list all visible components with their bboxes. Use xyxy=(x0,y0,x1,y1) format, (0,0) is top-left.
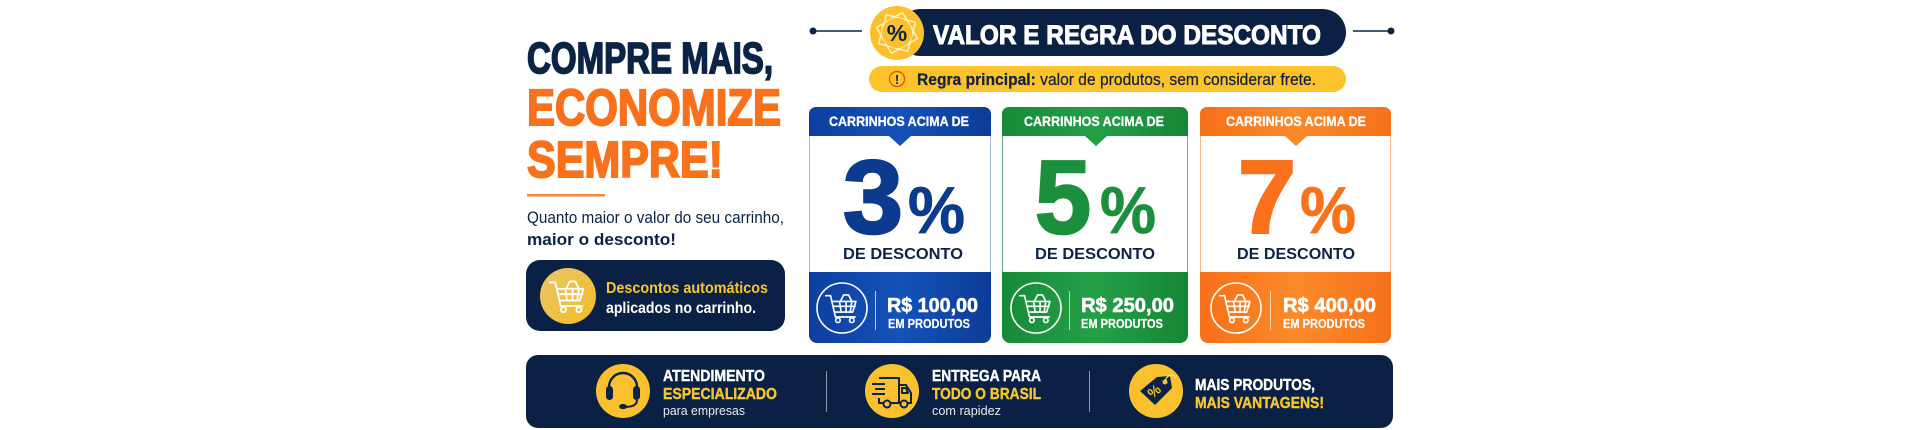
card header xyxy=(1200,107,1391,146)
icon: headset xyxy=(596,364,650,418)
benefit text: vantagens xyxy=(1195,377,1324,412)
panel: bottom benefits bar xyxy=(526,355,1393,428)
benefit text: vantagens: MAIS PRODUTOS, xyxy=(1195,377,1315,394)
card header xyxy=(1002,107,1188,146)
threshold: EM PRODUTOS xyxy=(888,317,970,331)
card header xyxy=(809,107,991,146)
value: 5% xyxy=(1035,140,1156,256)
benefit text: entrega xyxy=(932,368,1041,418)
panel: 7% card: DE DESCONTO xyxy=(1237,246,1355,263)
value: 7%: 7 xyxy=(1238,140,1296,256)
icon: cart xyxy=(540,268,596,324)
title: ECONOMIZE xyxy=(527,79,781,136)
callout: descontos automaticos xyxy=(526,260,785,331)
subtitle text: Quanto maior o valor do seu carrinho, xyxy=(527,209,784,227)
callout text xyxy=(606,280,768,317)
threshold: EM PRODUTOS xyxy=(1283,317,1365,331)
icon: cart xyxy=(1011,283,1061,333)
icon: cart xyxy=(1211,283,1261,333)
benefit text: entrega: com rapidez xyxy=(932,404,1001,418)
threshold: R$ 400,00 xyxy=(1283,294,1376,317)
value: 5%: % xyxy=(1100,173,1156,247)
icon: percent badge: % xyxy=(887,20,907,46)
icon: delivery truck xyxy=(865,364,919,418)
benefit text: entrega: ENTREGA PARA xyxy=(932,368,1041,385)
value: 3% xyxy=(843,140,965,256)
rule banner xyxy=(869,66,1346,92)
card header: CARRINHOS ACIMA DE xyxy=(1024,113,1164,129)
icon: cart xyxy=(817,283,867,333)
panel: left intro xyxy=(526,34,785,331)
icon: price tag xyxy=(1129,364,1183,418)
heading: valor e regra do desconto xyxy=(810,6,1394,60)
benefit text: atendimento: para empresas xyxy=(663,404,745,418)
benefit text: atendimento: ATENDIMENTO xyxy=(663,368,765,385)
icon: warning xyxy=(890,72,904,87)
panel: 5% card xyxy=(1002,107,1188,343)
benefit text: vantagens: MAIS VANTAGENS! xyxy=(1195,395,1324,412)
orange divider xyxy=(527,194,605,196)
panel: 5% card: DE DESCONTO xyxy=(1035,246,1155,263)
subtitle text: maior o desconto! xyxy=(527,230,676,249)
callout text: Descontos automáticos xyxy=(606,280,768,297)
panel: 3% card: DE DESCONTO xyxy=(843,246,963,263)
card header: CARRINHOS ACIMA DE xyxy=(1226,113,1366,129)
benefit text: atendimento: ESPECIALIZADO xyxy=(663,386,777,403)
panel: 3% card xyxy=(809,107,991,343)
icon: warning: ! xyxy=(895,72,899,87)
card header: CARRINHOS ACIMA DE xyxy=(829,113,969,129)
title: COMPRE MAIS, xyxy=(527,34,773,83)
value: 3%: % xyxy=(908,173,965,247)
icon: price tag: % xyxy=(1144,381,1164,401)
title xyxy=(527,34,781,188)
benefit text: atendimento xyxy=(663,368,777,418)
panel: 7% card xyxy=(1200,107,1391,343)
threshold: R$ 100,00 xyxy=(887,294,978,317)
threshold xyxy=(887,294,978,331)
value: 5%: 5 xyxy=(1035,140,1091,256)
threshold xyxy=(1081,294,1174,331)
threshold xyxy=(1283,294,1376,331)
value: 3%: 3 xyxy=(843,140,903,256)
rule banner: Regra principal: valor de produtos, sem considerar frete. xyxy=(917,70,1316,89)
icon: percent badge xyxy=(870,6,924,60)
value: 7%: % xyxy=(1300,173,1356,247)
callout text: aplicados no carrinho. xyxy=(606,300,756,317)
threshold: R$ 250,00 xyxy=(1081,294,1174,317)
threshold: EM PRODUTOS xyxy=(1081,317,1163,331)
value: 7% xyxy=(1238,140,1356,256)
benefit text: entrega: TODO O BRASIL xyxy=(932,386,1041,403)
heading: valor e regra do desconto: VALOR E REGRA DO DESCONTO xyxy=(933,20,1321,50)
subtitle text xyxy=(527,209,784,249)
title: SEMPRE! xyxy=(527,131,723,188)
